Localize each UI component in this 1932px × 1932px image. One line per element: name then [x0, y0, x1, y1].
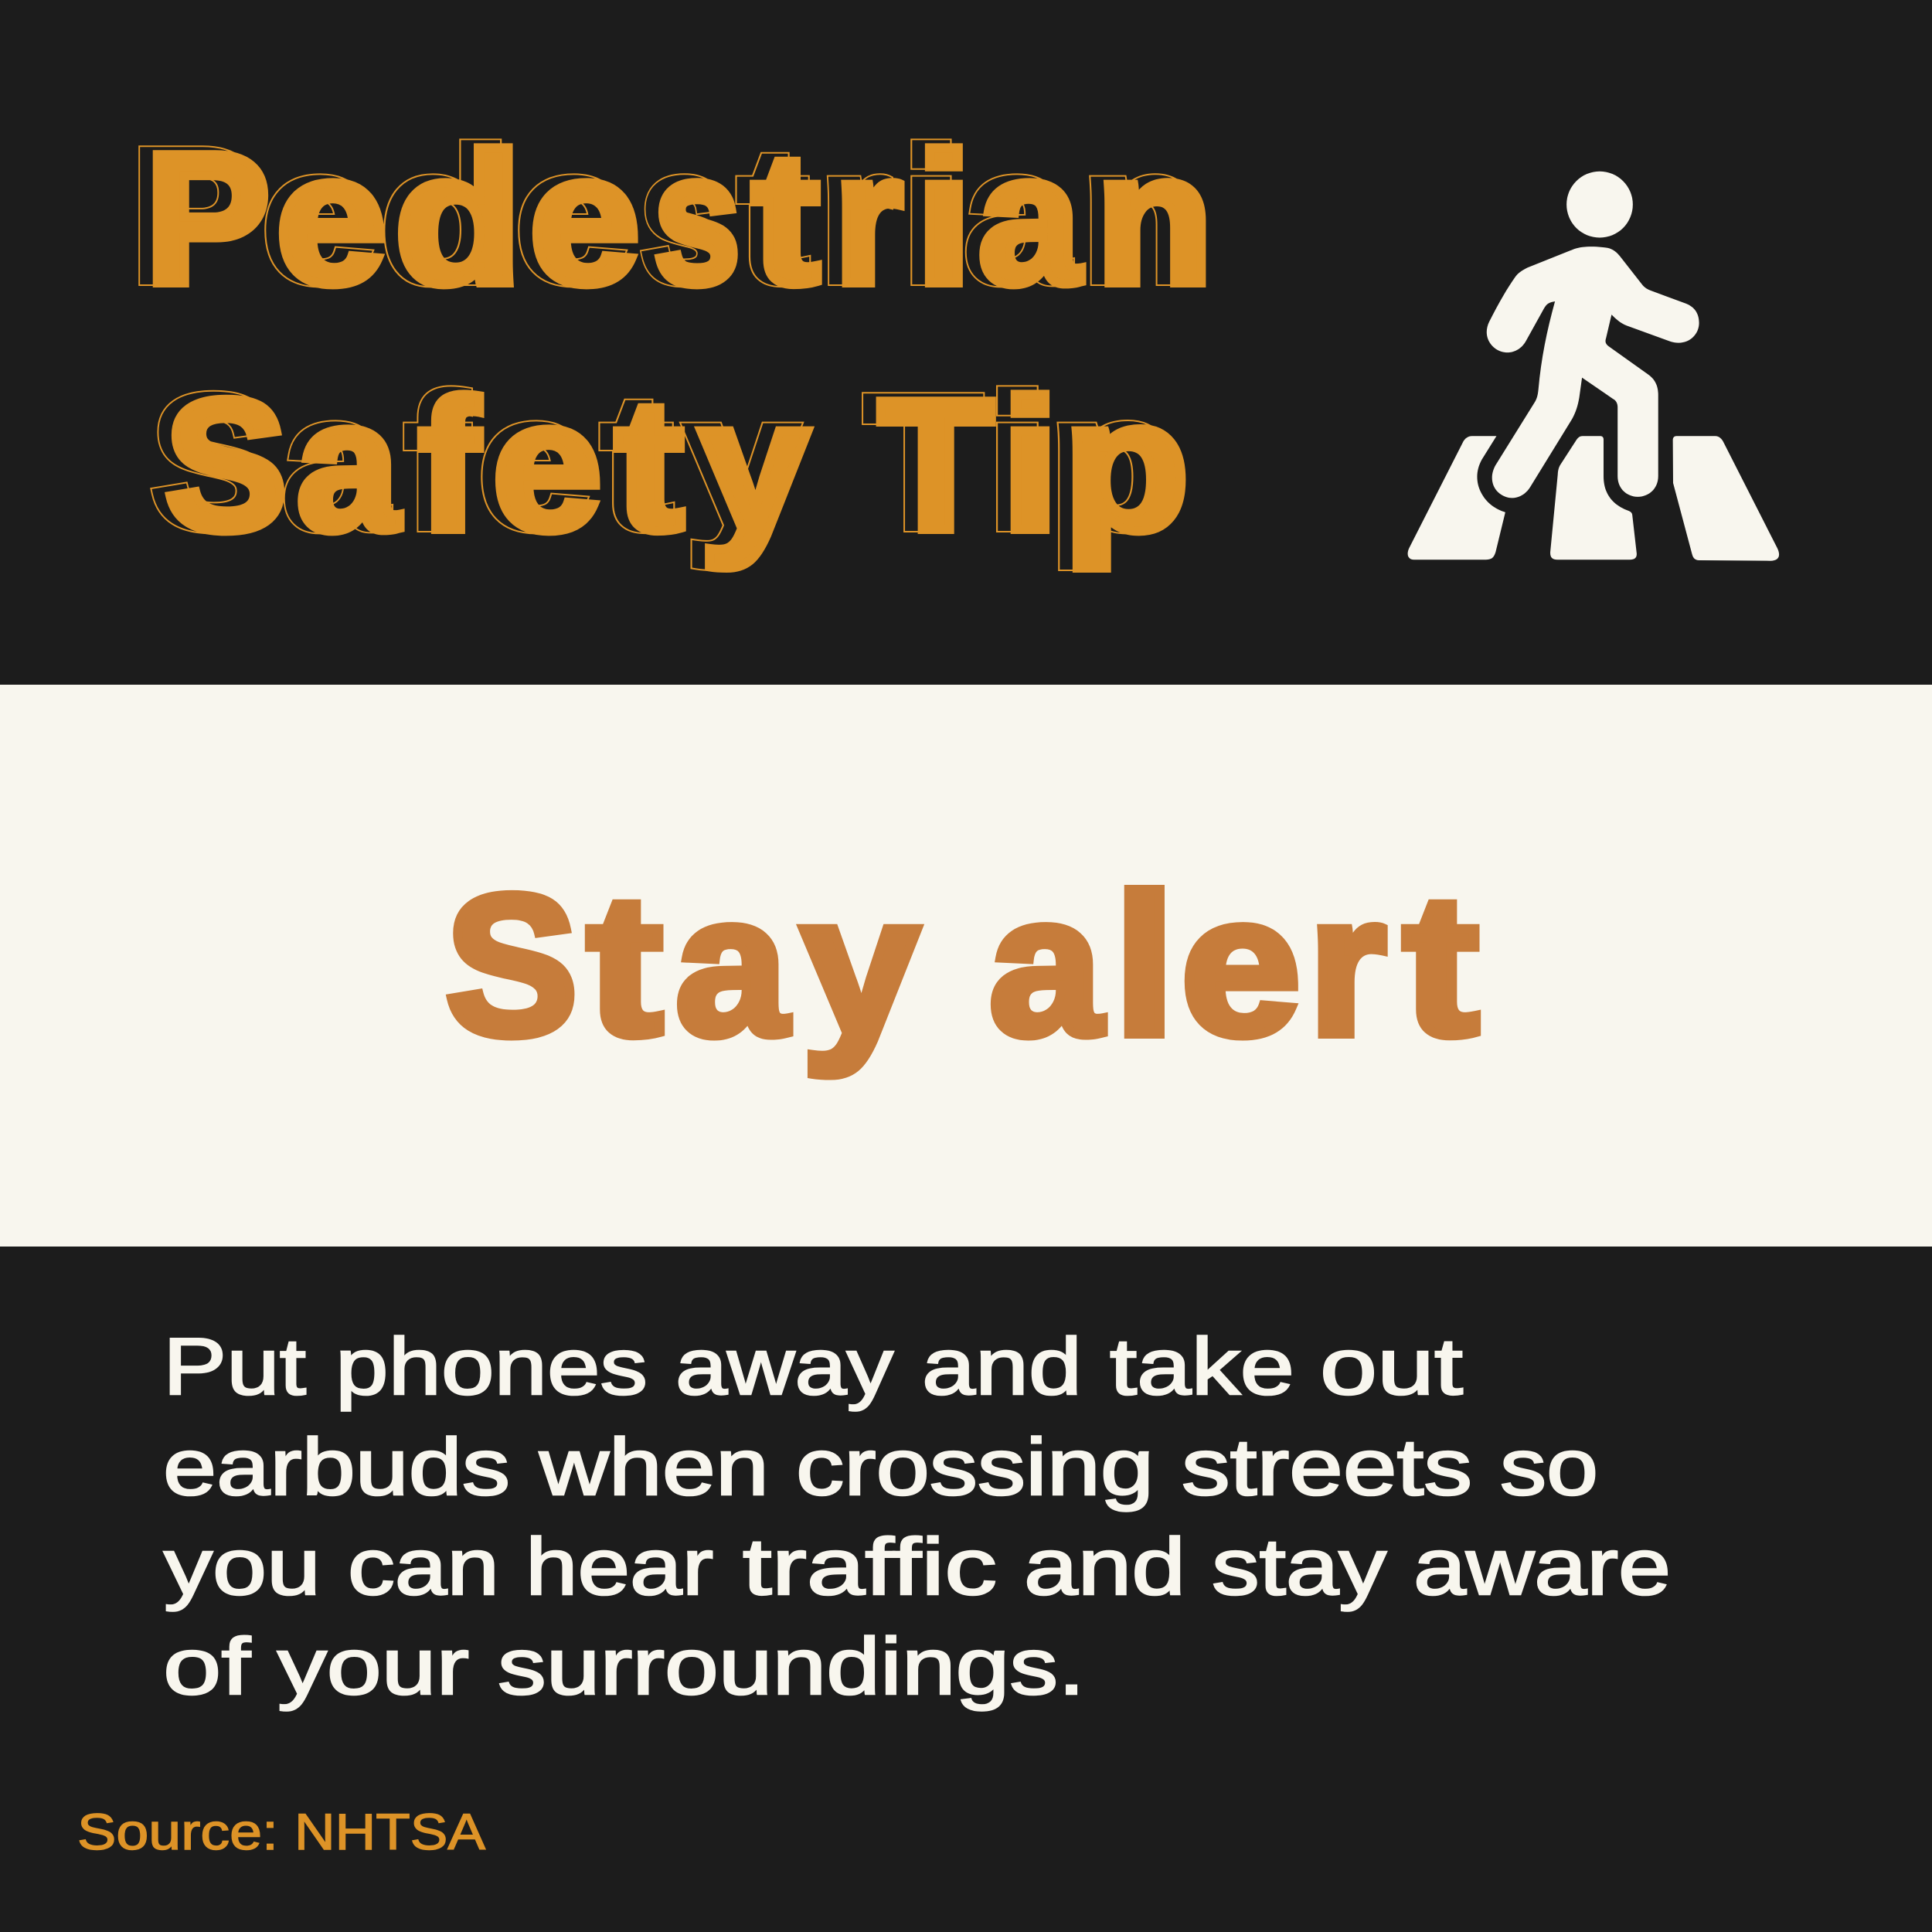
title outline offset layer: a: [966, 112, 1070, 320]
title solid fill layer: i: [1002, 362, 1059, 570]
title solid fill layer: t: [752, 115, 819, 323]
body text: your: [277, 1622, 469, 1712]
title outline offset layer: y: [687, 359, 796, 566]
title outline offset layer: S: [152, 359, 274, 566]
body text: streets: [1182, 1423, 1472, 1512]
heading: Stay alert: a: [675, 853, 789, 1077]
body text: earbuds: [163, 1423, 510, 1512]
title outline offset layer: i: [988, 359, 1046, 566]
title solid fill layer: a: [297, 362, 400, 570]
title solid fill layer: r: [834, 115, 903, 323]
title outline offset layer: T: [866, 359, 981, 566]
title solid fill layer: [145, 115, 1213, 570]
panel: cream band: [0, 685, 1932, 1247]
body text: [163, 1322, 1671, 1712]
icon: walking body: [1487, 247, 1699, 498]
title solid fill layer: T: [879, 362, 993, 570]
title outline offset layer: p: [1050, 359, 1176, 566]
icon: pedestrian on crosswalk: [1408, 172, 1779, 561]
title solid fill layer: P: [145, 115, 270, 323]
body text: take: [1110, 1322, 1294, 1412]
body text: out: [1320, 1322, 1463, 1412]
title outline offset layer: S: [152, 359, 274, 566]
source note: NHTSA: [294, 1803, 485, 1860]
title outline offset layer: e: [517, 112, 628, 320]
title outline offset layer: s: [641, 112, 728, 320]
title solid fill layer: t: [615, 362, 683, 570]
title outline offset layer: a: [966, 112, 1070, 320]
icon: head: [1566, 172, 1633, 237]
title outline offset layer: e: [264, 112, 374, 320]
title outline offset layer: y: [687, 359, 796, 566]
title solid fill layer: e: [492, 362, 602, 570]
title outline offset layer: d: [382, 112, 509, 320]
heading: Stay alert: r: [1309, 853, 1386, 1077]
title outline offset layer: t: [740, 112, 807, 320]
title outline offset layer: e: [480, 359, 589, 566]
title outline offset layer: p: [1050, 359, 1176, 566]
title outline offset layer: r: [821, 112, 890, 320]
body text: surroundings.: [498, 1622, 1085, 1712]
body text: of: [163, 1622, 251, 1712]
title outline offset layer: i: [903, 112, 959, 320]
title solid fill layer: f: [419, 362, 480, 570]
title outline offset layer: n: [1083, 112, 1200, 320]
title outline offset layer: P: [132, 112, 257, 320]
title solid fill layer: S: [165, 362, 287, 570]
title solid fill layer: s: [654, 115, 740, 323]
heading: Stay alert: l: [1114, 853, 1175, 1077]
title outline offset layer: t: [603, 359, 671, 566]
title solid fill layer: a: [978, 115, 1082, 323]
body text: crossing: [796, 1423, 1154, 1512]
title outline offset layer: a: [284, 359, 388, 566]
title outline offset layer: d: [382, 112, 509, 320]
heading: Stay alert: S: [446, 853, 578, 1077]
heading: Stay alert: t: [587, 853, 662, 1077]
icon: middle crosswalk stripe: [1550, 436, 1637, 560]
body text: hear: [526, 1522, 713, 1612]
body text: and: [1024, 1522, 1185, 1612]
body text: Put: [163, 1322, 306, 1412]
title outline offset layer: f: [406, 359, 467, 566]
title outline offset layer: r: [821, 112, 890, 320]
body text: you: [164, 1522, 321, 1612]
title outline offset layer: i: [988, 359, 1046, 566]
heading: Stay alert: a: [989, 853, 1104, 1077]
title outline offset layer: t: [603, 359, 671, 566]
title: Pedestrian Safety Tip: [132, 112, 1213, 570]
body text: and: [922, 1322, 1082, 1412]
title solid fill layer: p: [1063, 362, 1189, 570]
source note: Source:: [77, 1803, 278, 1860]
body text: away: [675, 1322, 893, 1412]
title outline offset layer: e: [517, 112, 628, 320]
title outline offset layer: s: [641, 112, 728, 320]
body text: aware: [1413, 1522, 1671, 1612]
title outline offset layer: f: [406, 359, 467, 566]
title solid fill layer: e: [276, 115, 386, 323]
title solid fill layer: i: [916, 115, 972, 323]
heading: Stay alert: y: [801, 853, 920, 1077]
title solid fill layer: n: [1096, 115, 1213, 323]
body text: traffic: [743, 1522, 997, 1612]
title outline offset layer: a: [284, 359, 388, 566]
heading: Stay alert: t: [1403, 853, 1478, 1077]
heading: Stay alert: e: [1181, 853, 1301, 1077]
body text: stay: [1212, 1522, 1386, 1612]
title outline offset layer: P: [132, 112, 257, 320]
body text: phones: [335, 1322, 648, 1412]
icon: right crosswalk stripe: [1673, 436, 1779, 561]
body text: so: [1500, 1423, 1598, 1512]
body text: when: [539, 1423, 769, 1512]
title outline offset layer: [132, 112, 1200, 566]
title solid fill layer: e: [529, 115, 640, 323]
icon: left crosswalk stripe: [1408, 436, 1505, 560]
body text: can: [348, 1522, 499, 1612]
title outline offset layer: e: [480, 359, 589, 566]
title outline offset layer: t: [740, 112, 807, 320]
title outline offset layer: T: [866, 359, 981, 566]
title outline offset layer: e: [264, 112, 374, 320]
title solid fill layer: d: [395, 115, 522, 323]
title outline offset layer: n: [1083, 112, 1200, 320]
title outline offset layer: i: [903, 112, 959, 320]
title solid fill layer: y: [699, 362, 808, 570]
